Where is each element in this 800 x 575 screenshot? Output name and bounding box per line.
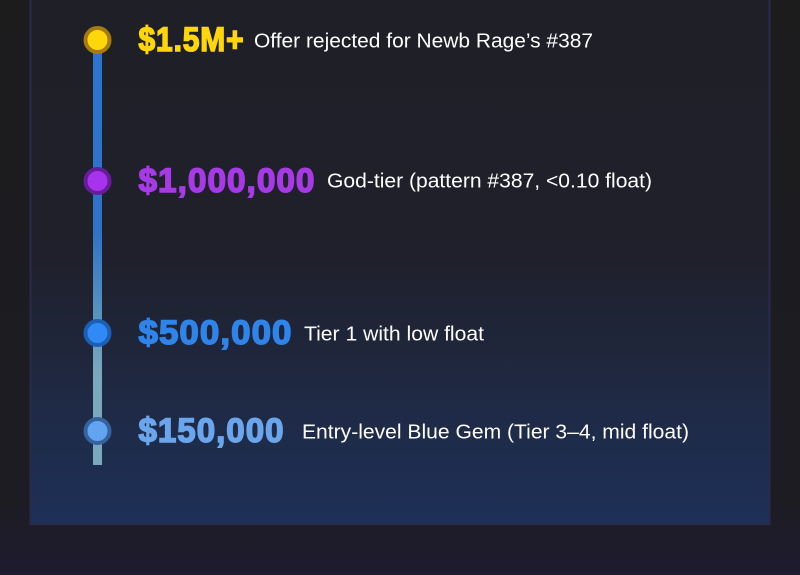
description: god-tier: God-tier (pattern #387, <0.10 float) xyxy=(327,170,652,192)
icon: gold marker xyxy=(86,28,110,52)
description: offer rejected: Offer rejected for Newb Rage’s #387 xyxy=(254,30,593,52)
icon: purple marker xyxy=(86,169,110,193)
price: $1,000,000: $1,000,000 xyxy=(138,162,316,200)
description: entry-level: Entry-level Blue Gem (Tier 3–4, mid float) xyxy=(302,422,689,444)
icon: light blue marker xyxy=(86,419,110,443)
tier: $500,000 xyxy=(86,314,484,352)
price: $1.5M+: $1.5M+ xyxy=(138,21,244,59)
price: $500,000: $500,000 xyxy=(138,314,292,352)
timeline vertical line xyxy=(93,40,102,465)
description: tier 1: Tier 1 with low float xyxy=(304,324,484,346)
icon: blue marker xyxy=(86,321,110,345)
tier: $1,000,000 xyxy=(86,162,652,200)
tier: $150,000 xyxy=(86,412,689,450)
price: $150,000: $150,000 xyxy=(138,412,284,450)
tier: $1.5M+ xyxy=(86,21,593,59)
